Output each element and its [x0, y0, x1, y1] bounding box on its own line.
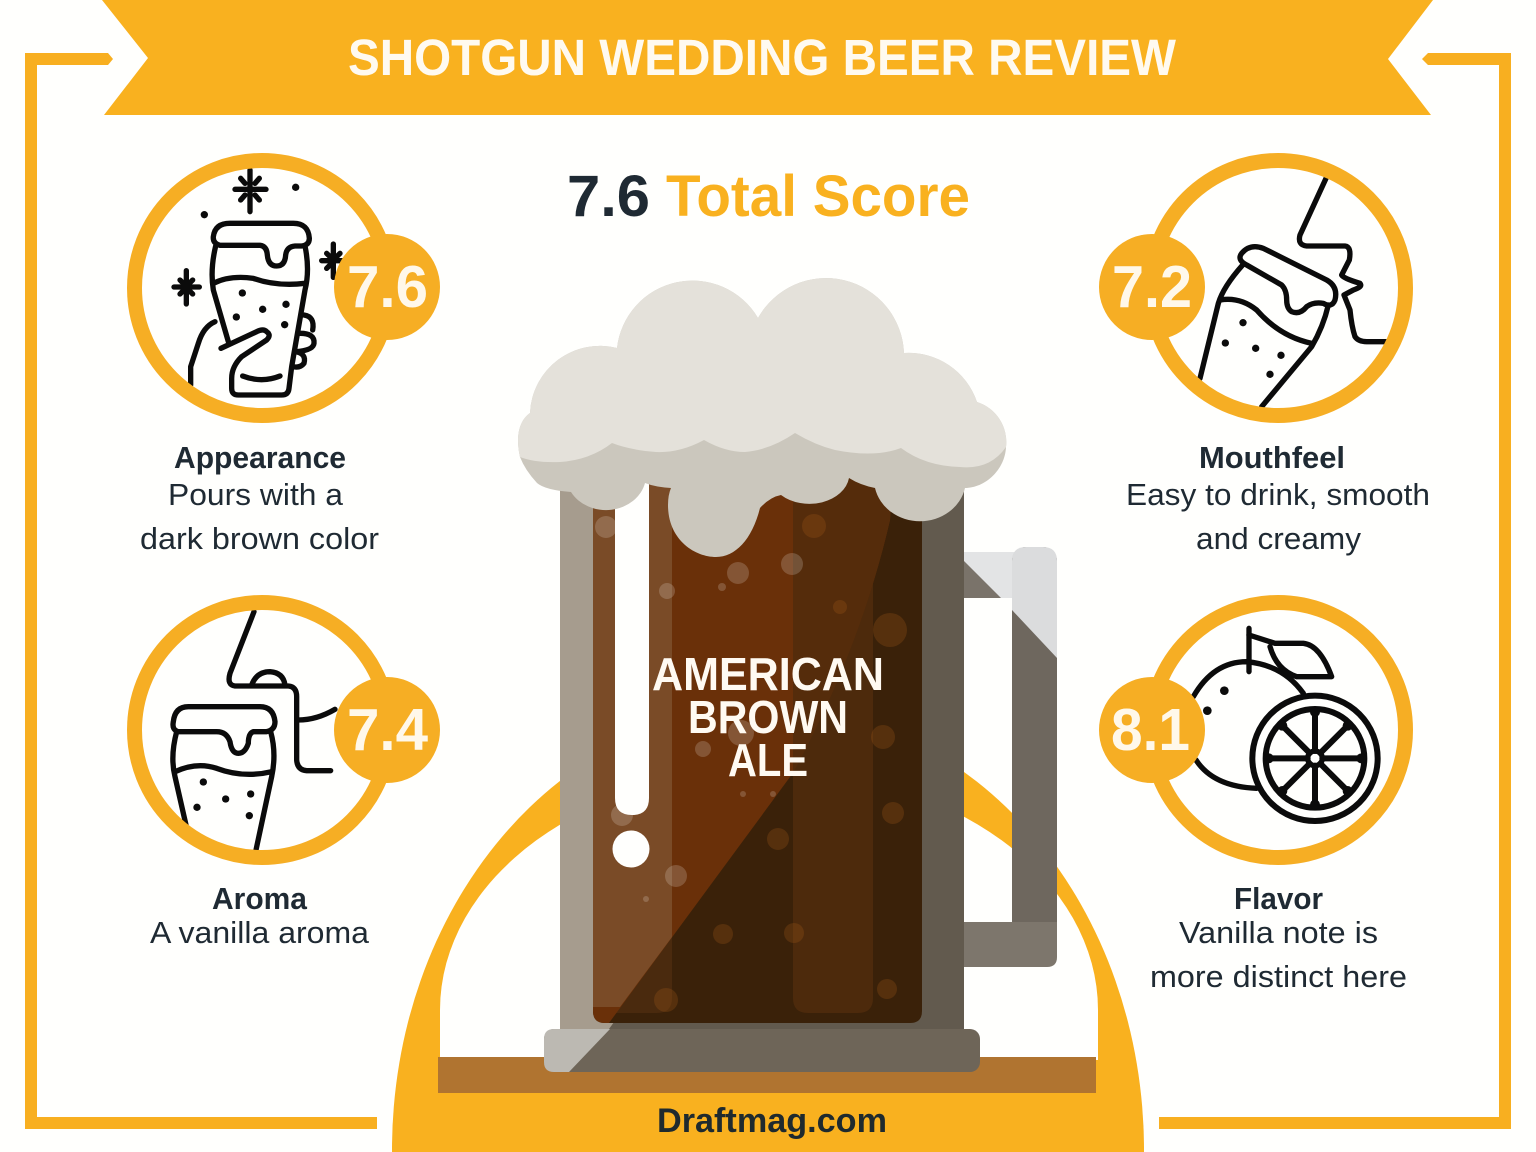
orange arch behind mug [392, 707, 1144, 1152]
score badge: 7.2 [1112, 254, 1192, 320]
caption: Easy to drink, smooth [1126, 477, 1430, 512]
panel: aroma [134, 602, 440, 950]
glass body [560, 470, 964, 1035]
caption [1126, 440, 1430, 556]
mug label [652, 648, 884, 786]
caption: Mouthfeel [1199, 440, 1345, 475]
score badge: 7.6 [347, 254, 428, 320]
caption: Vanilla note is [1179, 915, 1378, 950]
panel: flavor [1099, 602, 1407, 994]
bubbles [595, 514, 907, 1012]
caption: Pours with a [168, 477, 344, 512]
caption [140, 440, 379, 556]
caption: Aroma [212, 881, 308, 916]
source credit: Draftmag.com [657, 1102, 887, 1140]
glass highlight [612, 470, 650, 868]
total score heading: 7.6 [567, 164, 650, 229]
ring [1150, 160, 1406, 416]
icon: nose over glass [173, 612, 335, 850]
wooden table [438, 1057, 1096, 1093]
caption: dark brown color [140, 521, 379, 556]
score badge: 8.1 [1111, 697, 1190, 763]
caption: more distinct here [1150, 959, 1407, 994]
caption: Appearance [174, 440, 346, 475]
caption [1150, 881, 1407, 994]
mug handle [963, 547, 1057, 967]
total score heading: Total Score [666, 164, 970, 229]
ring [1150, 602, 1406, 858]
caption: Flavor [1234, 881, 1323, 916]
title banner: SHOTGUN WEDDING BEER REVIEW [348, 29, 1177, 86]
caption [150, 881, 370, 950]
icon: orange and slice [1193, 628, 1378, 821]
panel: appearance [134, 160, 440, 556]
mug label: BROWN [688, 691, 848, 743]
score badge [334, 677, 440, 783]
icon: glass at lips [1200, 178, 1386, 407]
caption: A vanilla aroma [150, 915, 370, 950]
ring [134, 160, 390, 416]
panel: mouthfeel [1099, 160, 1430, 556]
score badge [1099, 677, 1205, 783]
caption: and creamy [1196, 521, 1362, 556]
beer liquid [593, 470, 922, 1023]
beer foam [518, 278, 1006, 557]
beer mug [518, 278, 1057, 1072]
score badge [1099, 234, 1205, 340]
mug label: ALE [728, 734, 808, 786]
mug label: AMERICAN [652, 648, 884, 700]
title banner [102, 0, 1433, 115]
icon: beer glass in hand [174, 170, 347, 395]
mug base [544, 1029, 980, 1072]
score badge: 7.4 [347, 697, 428, 763]
ring [134, 602, 390, 858]
score badge [334, 234, 440, 340]
